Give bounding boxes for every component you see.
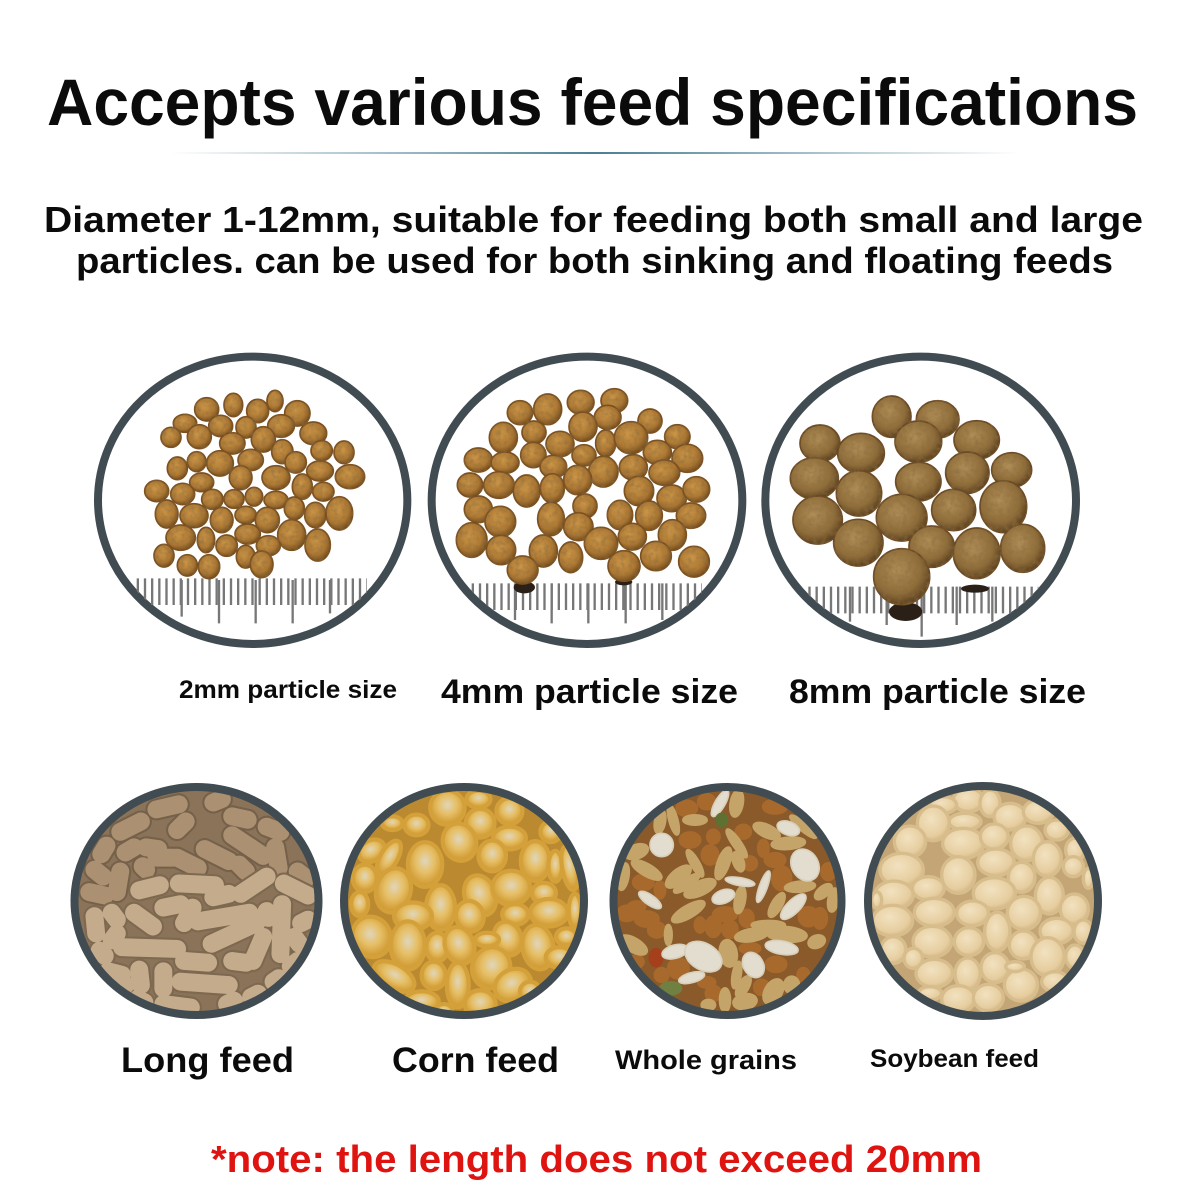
panel: 4mm pellets photo circle	[432, 357, 742, 644]
panel: corn feed photo circle	[342, 785, 586, 1018]
panel: 2mm pellets photo circle	[98, 357, 407, 644]
label: long feed: Long feed	[121, 1041, 294, 1080]
label: 4mm particle size: 4mm particle size	[441, 673, 738, 711]
panel: long feed photo circle	[72, 785, 320, 1017]
panel: 8mm pellets photo circle	[765, 357, 1076, 644]
title: Accepts various feed specifications	[47, 65, 1138, 139]
label: 2mm particle size: 2mm particle size	[179, 676, 397, 704]
note: length limit: *note: the length does not exceed 20mm	[211, 1139, 982, 1181]
subtitle text block: Diameter 1-12mm, suitable for feeding both small and large	[44, 199, 1143, 240]
label: corn feed: Corn feed	[392, 1041, 559, 1080]
subtitle text block: particles. can be used for both sinking and floating feeds	[76, 240, 1113, 281]
subtitle text block	[44, 199, 1143, 281]
label: whole grains: Whole grains	[615, 1045, 797, 1075]
label: 8mm particle size: 8mm particle size	[789, 673, 1086, 711]
panel: whole grains photo circle	[612, 785, 844, 1017]
label: soybean feed: Soybean feed	[870, 1045, 1039, 1073]
panel: soybean feed photo circle	[867, 785, 1099, 1017]
